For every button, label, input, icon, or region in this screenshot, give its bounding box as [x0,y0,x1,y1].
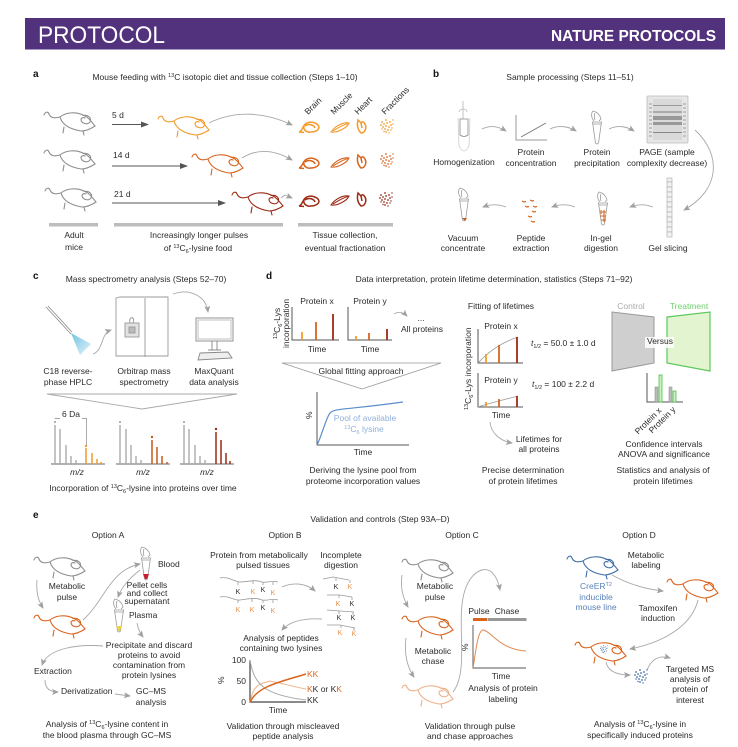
mass spectrum 2 [116,421,170,477]
fitted protein y chart: Protein y [484,375,519,385]
lysine pool chart: C [350,424,357,434]
header banner: PROTOCOL [38,22,165,49]
global fitting triangle [282,363,441,389]
protein x mini chart [292,296,339,354]
panel e heading [33,510,450,524]
option D texts: labeling [631,560,661,570]
Orbitrap instrument [116,297,168,357]
upper step labels: Protein [584,147,611,157]
panel e heading: e [33,510,39,521]
pulse chase chart: % [460,643,470,651]
option B: Option B [268,530,302,540]
mass spectrum 1: 6 Da [62,409,80,419]
pool caption: proteome incorporation values [306,476,420,486]
lysine pool chart: Time [354,447,373,457]
protein precipitation tube [592,111,602,144]
blood tube [141,547,151,580]
panel a heading: 13 [168,73,174,79]
fitting axis label: -Lys incorporation [463,327,473,395]
stage captions: Adult [64,230,84,240]
lower step labels: digestion [584,243,618,253]
option C texts: Metabolic [417,581,454,591]
lysine K labels: K [236,607,241,614]
option A mice [34,557,85,638]
panel c step labels [43,366,239,387]
fitting axis label: 6 [469,395,475,398]
stage captions: Tissue collection, [313,230,377,240]
pool caption [306,465,420,486]
lysine K labels [236,584,357,638]
fitted protein x chart: Protein x [484,321,519,331]
half-life values: 1/2 [534,385,542,391]
protein y mini chart: Protein y [353,296,388,306]
option D texts: Targeted MS [666,664,714,674]
panel e: validation and controls [33,510,718,741]
protein x mini chart: Protein x [300,296,335,306]
panel c step labels: spectrometry [119,377,169,387]
option C texts [415,581,538,741]
option D texts: T2 [606,582,612,588]
panel c caption: Incorporation of [49,483,108,493]
option A texts [34,559,193,740]
lysine K labels: K [261,605,266,612]
panel a heading: C isotopic diet and tissue collection (Steps 1–10) [174,72,358,82]
stage captions: -lysine food [189,243,232,253]
peptide strands [220,577,355,631]
stage captions: C [179,243,186,253]
lysine K labels: K [348,584,353,591]
option A texts: Plasma [129,610,158,620]
panel c step labels: Orbitrap mass [117,366,171,376]
header banner: NATURE PROTOCOLS [551,28,716,45]
option A texts: the blood plasma through GC–MS [43,730,172,740]
HPLC needle and spray [46,306,91,355]
treatment bar chart: Protein y [647,404,678,435]
lysine K labels: K [271,590,276,597]
gray stage bars [49,223,393,226]
option D texts: 13 [637,720,643,726]
statistics note: Confidence intervals [625,439,703,449]
option D arrows [606,575,698,675]
option D texts [575,550,714,740]
fitting axis label: C [463,398,473,404]
option D texts: C [643,719,650,729]
option C [401,530,538,741]
option A texts: contamination from [113,660,185,670]
lysine pool chart: Pool of available [334,413,396,423]
option A [34,530,193,740]
panel a: mouse feeding [33,69,411,255]
half-life values: t [531,338,534,348]
option C texts: labeling [488,694,518,704]
panel d: data interpretation [266,271,710,486]
option D [567,530,718,740]
option A texts: C [95,719,101,729]
incorporation axis label: -Lys [272,308,282,324]
option C texts: Validation through pulse [425,721,516,731]
lysine K labels: K [250,607,255,614]
option B arrows [282,584,322,630]
half-life values: = 50.0 ± 1.0 d [541,338,596,348]
miscleavage line chart: KK [307,695,319,705]
labeled mice [158,116,283,215]
option D texts: Tamoxifen [639,603,678,613]
gel slices strip [667,178,672,237]
fitted protein y chart: Time [492,410,511,420]
panel a heading [33,69,358,82]
mass spectrum 3: m/z [200,467,215,477]
option C texts: chase [422,656,445,666]
lysine K labels: K [352,631,357,638]
protein concentration graph [516,115,547,140]
tissue labels: Muscle [328,90,355,116]
option D texts: Analysis of [594,719,635,729]
panel a heading: Mouse feeding with [92,72,166,82]
panel d heading: d [266,271,272,282]
option A texts: Analysis of [46,719,87,729]
option A texts: Metabolic [49,581,86,591]
option D texts: inducible [579,592,613,602]
option A texts: and collect [127,588,168,598]
lysine pool chart: 6 [357,430,360,436]
option B headings: digestion [324,560,358,570]
option B texts [227,633,340,741]
protein x mini chart: Time [308,344,327,354]
option A texts: -lysine content in [104,719,169,729]
upper step labels: Homogenization [433,157,495,167]
lower step labels: extraction [513,243,550,253]
lysine K labels: K [236,589,241,596]
option C texts: Analysis of protein [468,683,538,693]
statistics caption: protein lifetimes [633,476,693,486]
stage captions: 6 [186,249,189,255]
stage captions: Increasingly longer pulses [150,230,248,240]
upper step labels [433,147,707,168]
control versus treatment: Control [617,301,645,311]
option C texts: pulse [425,592,445,602]
MaxQuant computer [196,318,233,360]
incorporation axis label [272,299,291,348]
panel c arrows [93,292,208,354]
lower step labels: In-gel [590,233,612,243]
incorporation axis label: 13 [273,333,279,339]
miscleavage line chart: KK [307,669,319,679]
option C: Option C [445,530,479,540]
mass spectrum 1 [51,409,105,477]
miscleavage line chart: 100 [232,655,246,665]
lysine K labels: K [351,615,356,622]
option A texts: Precipitate and discard [106,640,193,650]
panel b heading [433,69,634,82]
stage captions [64,230,386,255]
lysine K labels: K [251,589,256,596]
option D: Option D [622,530,656,540]
option A arrows [37,564,143,696]
adult gray mice [44,112,96,211]
option D texts: protein of [672,684,708,694]
option B headings: Protein from metabolically [210,550,309,560]
stage captions: eventual fractionation [305,243,386,253]
panel c: mass spectrometry [33,271,239,495]
option D texts: -lysine in [653,719,686,729]
treatment bar chart [633,373,683,436]
option B [210,530,362,741]
option D mice [567,556,718,665]
option A texts: GC–MS [136,686,166,696]
lysine K labels: K [334,584,339,591]
option D texts: mouse line [575,602,617,612]
header banner [25,18,725,50]
miscleavage line chart: 50 [237,676,246,686]
option D texts: specifically induced proteins [587,730,693,740]
panel d heading: Data interpretation, protein lifetime determination, statistics (Steps 71–92) [356,274,633,284]
upper step labels: complexity decrease) [627,158,707,168]
incorporation axis label: 6 [278,324,284,327]
option A texts: Pellet cells [127,580,167,590]
upper step labels: concentration [505,158,557,168]
option D texts: induction [641,613,675,623]
panel c heading: c [33,271,39,282]
stage captions: of [164,243,171,253]
upper step labels: PAGE (sample [639,147,695,157]
pulse chase chart [460,606,526,681]
in-gel digestion tube [598,192,608,225]
option A texts: 13 [89,720,95,726]
lysine K labels: K [337,615,342,622]
option A texts: proteins to avoid [118,650,180,660]
miscleavage line chart: KK or KK [307,684,342,694]
mass spectrum 3 [180,421,234,477]
option A: Option A [92,530,125,540]
panel a heading: a [33,69,39,80]
pulse arrows with durations: 5 d [112,110,124,120]
fitted protein x chart [478,321,523,363]
lifetimes caption: Precise determination [482,465,564,475]
fitting of lifetimes heading: Fitting of lifetimes [468,301,534,311]
statistics note: ANOVA and significance [618,449,710,459]
option B headings [210,550,362,570]
lower step labels: concentrate [441,243,485,253]
miscleavage line chart: Time [269,705,288,715]
pool caption: Deriving the lysine pool from [309,465,417,475]
control versus treatment [612,301,710,371]
lifetimes caption: of protein lifetimes [489,476,557,486]
upper step labels: Protein [518,147,545,157]
statistics caption: Statistics and analysis of [616,465,710,475]
panel b heading: Sample processing (Steps 11–51) [506,72,634,82]
pulse chase chart: Chase [495,606,520,616]
miscleavage line chart [216,655,342,715]
option A texts: supernatant [125,596,170,606]
option B headings: Incomplete [320,550,362,560]
pulse chase chart: Pulse [468,606,490,616]
panel c caption: C [117,483,123,493]
peptide fragments [522,200,537,222]
pulse arrows with durations [112,110,225,203]
plasma tube [114,599,124,632]
lysine K labels: K [261,587,266,594]
lifetimes for all proteins: Lifetimes for [516,434,562,444]
miscleavage line chart: 0 [241,697,246,707]
pulse chase chart: Time [492,671,511,681]
lysine pool chart: lysine [360,424,384,434]
option D texts: 6 [650,725,653,731]
lysine K labels: K [350,601,355,608]
all proteins note: ... [417,313,425,323]
panel c step labels: C18 reverse- [43,366,93,376]
control versus treatment: Treatment [670,301,709,311]
protein y mini chart [348,296,392,354]
lower step labels: Vacuum [448,233,478,243]
control versus treatment: Versus [647,336,673,346]
lifetimes for all proteins: all proteins [518,444,560,454]
option C texts: Metabolic [415,646,452,656]
all proteins note [394,312,443,334]
miscleavage line chart: % [216,676,226,684]
arrows to tissues [209,114,292,198]
option D texts: interest [676,695,705,705]
option A texts: Blood [158,559,180,569]
lysine pool chart: % [304,411,314,419]
all proteins note: All proteins [401,324,443,334]
protein y mini chart: Time [361,344,380,354]
panel b heading: b [433,69,439,80]
option C mice [402,559,453,708]
lysine K labels: K [336,601,341,608]
fitted protein y chart [478,373,523,420]
half-life values: = 100 ± 2.2 d [542,379,594,389]
homogenizer icon [458,101,470,151]
option D texts: CreER [580,581,606,591]
pulse arrows with durations: 14 d [113,150,130,160]
upper step labels: precipitation [574,158,620,168]
fitting axis label: 13 [464,404,470,410]
global fitting triangle: Global fitting approach [318,366,404,376]
option C arrows [401,570,500,692]
panel c heading [33,271,226,284]
lifetimes for all proteins [490,422,562,454]
tissue labels [302,85,411,116]
lower step labels: Gel slicing [648,243,688,253]
option A texts: pulse [57,592,77,602]
process arrows [482,127,713,210]
tissue labels: Brain [302,95,324,116]
panel c caption: 6 [123,489,126,495]
lysine K labels: K [338,630,343,637]
option B texts: Validation through miscleaved [227,721,340,731]
option B headings: pulsed tissues [236,560,290,570]
option C texts: and chase approaches [427,731,513,741]
lysine pool chart: 13 [344,425,350,431]
incorporation axis label: incorporation [281,299,291,348]
option A texts: Extraction [34,666,72,676]
panel c step labels: data analysis [189,377,239,387]
half-life values: t [532,379,535,389]
stage captions: 13 [173,244,179,250]
option A texts: analysis [136,697,166,707]
PAGE gel [647,96,688,143]
option B texts: containing two lysines [240,643,322,653]
lysine pool chart [304,392,409,457]
option A texts: 6 [101,725,104,731]
panel b: sample processing [433,69,713,253]
labeled protein clusters [600,645,648,684]
panel c caption: -lysine into proteins over time [126,483,237,493]
stage captions: mice [65,242,83,252]
panel c step labels: MaxQuant [194,366,234,376]
lower step labels [441,233,688,253]
panel c step labels: phase HPLC [44,377,92,387]
mass spectrum 2: m/z [136,467,151,477]
lower step labels: Peptide [517,233,546,243]
pulse arrows with durations: 21 d [114,189,131,199]
option B texts: Analysis of peptides [243,633,319,643]
incorporation axis label: C [272,327,282,333]
statistics caption [616,465,710,486]
lysine K labels: K [271,608,276,615]
zoom triangle [47,394,237,409]
option D texts: analysis of [670,674,711,684]
half-life values: 1/2 [533,344,541,350]
option D texts: Metabolic [628,550,665,560]
half-life values [531,338,596,391]
option A texts: protein lysines [122,670,176,680]
mass spectrum 1: m/z [70,467,85,477]
tissue labels: Fractions [379,85,411,116]
lifetimes caption [482,465,564,486]
tissue icons [299,119,394,207]
panel c heading: Mass spectrometry analysis (Steps 52–70) [66,274,226,284]
tissue labels: Heart [352,94,375,116]
statistics note [618,439,710,459]
panel e heading: Validation and controls (Step 93A–D) [310,514,450,524]
vacuum concentrate tube [459,188,469,221]
option B texts: peptide analysis [253,731,313,741]
panel d heading [266,271,633,284]
panel c caption: 13 [111,484,117,490]
treatment bar chart: Protein x [633,405,664,436]
option A texts: Derivatization [61,686,113,696]
